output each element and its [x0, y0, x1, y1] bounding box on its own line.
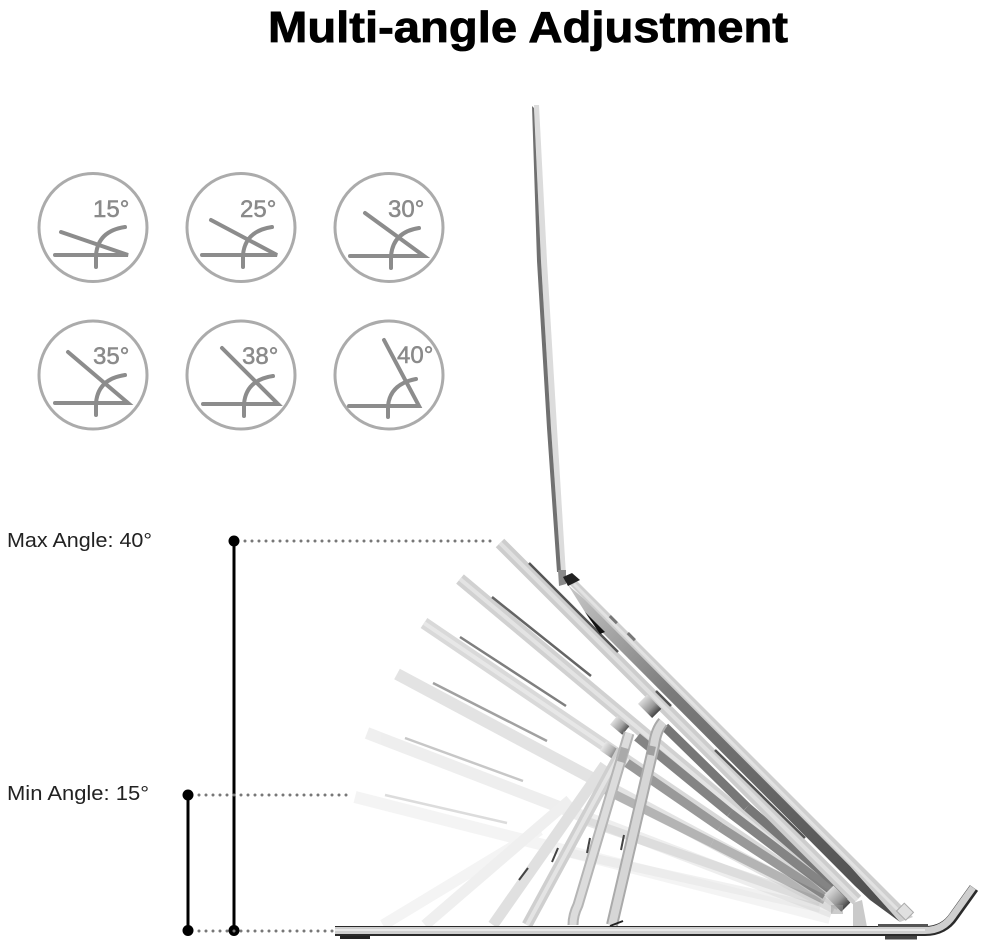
plate at 40 degrees	[500, 543, 857, 900]
icon: 40 degrees: 40°	[397, 342, 433, 369]
leg at 15 degrees	[383, 830, 540, 925]
pivot hinges at the lower plate ends	[824, 886, 850, 914]
icon: 30 degrees: 30°	[388, 196, 424, 223]
icon: 30 degrees	[335, 174, 443, 282]
plate at 20 degrees	[367, 733, 832, 912]
label: min angle: Min Angle: 15°	[7, 783, 149, 805]
icon: 15 degrees: 15°	[93, 196, 129, 223]
icon: 38 degrees: 38°	[242, 343, 278, 370]
support legs	[383, 722, 663, 926]
plate at 25 degrees	[397, 674, 835, 908]
icon: 38 degrees	[187, 321, 295, 429]
height scale: max and min angle markers	[7, 530, 497, 936]
base plate with curved front lip	[335, 888, 974, 940]
icon: 25 degrees: 25°	[240, 196, 276, 223]
leg at 30 degrees	[527, 750, 622, 925]
leg at 40 degrees	[610, 722, 663, 926]
leg at 20 degrees	[425, 800, 570, 925]
rear support block	[853, 900, 867, 927]
leg at 35 degrees	[573, 733, 629, 925]
icon: 15 degrees	[39, 174, 147, 282]
panel: angle icons	[39, 174, 443, 429]
laptop base	[563, 573, 913, 922]
min height bracket	[182, 790, 352, 936]
rubber foot right	[885, 936, 917, 940]
laptop screen	[532, 105, 566, 586]
rubber foot left	[340, 936, 370, 939]
plate at 15 degrees	[355, 795, 830, 918]
icon: 25 degrees	[187, 174, 295, 282]
plate at 35 degrees	[460, 579, 847, 903]
title: Multi-angle Adjustment	[268, 3, 788, 52]
icon: 35 degrees	[39, 321, 147, 429]
leg at 25 degrees	[493, 765, 605, 925]
stand illustration	[335, 105, 974, 940]
plate at 30 degrees	[424, 623, 840, 905]
max height bracket	[228, 536, 497, 936]
label: max angle: Max Angle: 40°	[7, 530, 152, 552]
icon: 35 degrees: 35°	[93, 343, 129, 370]
icon: 40 degrees	[335, 321, 443, 429]
